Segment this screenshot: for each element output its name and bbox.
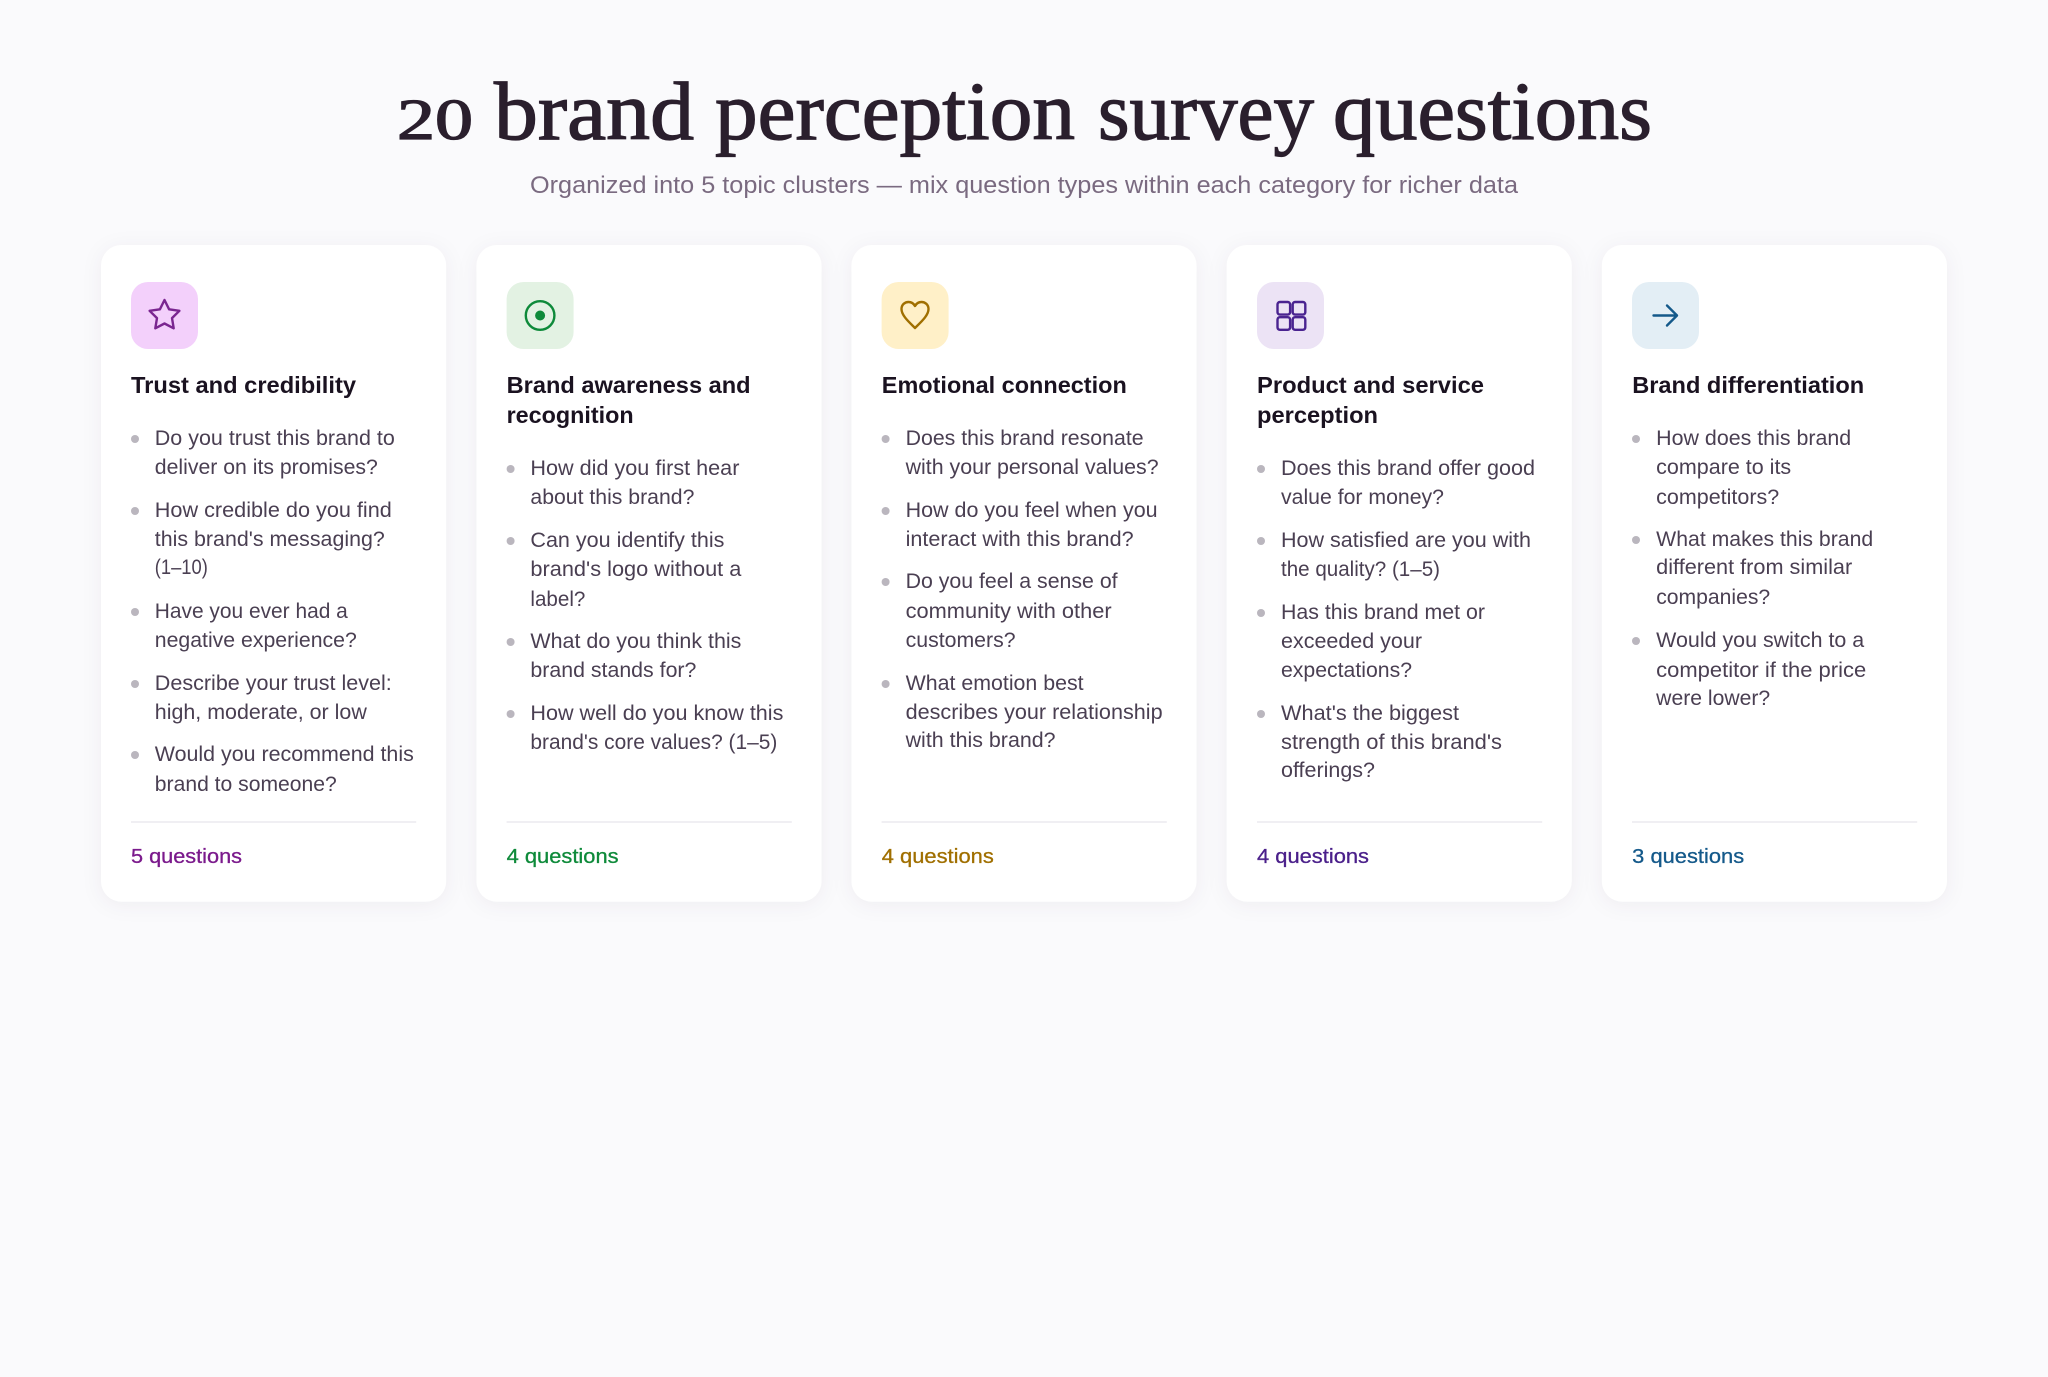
icon: arrow <box>1632 282 1699 349</box>
question 3: brand stands for? <box>530 659 696 682</box>
question 4 <box>507 702 783 754</box>
question 2: brand's logo without a <box>530 558 742 581</box>
panel: brand awareness and recognition <box>476 245 822 902</box>
heading: Emotional connection <box>882 372 1127 398</box>
heading: Brand differentiation <box>1632 372 1864 398</box>
question 3: Do you feel a sense of <box>906 570 1118 593</box>
icon: star <box>131 282 198 349</box>
question 2 <box>882 499 1158 551</box>
question 1: How does this brand <box>1656 427 1851 450</box>
question 4: How well do you know this <box>530 702 783 725</box>
question 4: offerings? <box>1281 759 1375 782</box>
question 1: competitors? <box>1656 486 1779 509</box>
question 4: brand's core values? (1–5) <box>530 731 777 754</box>
question 3: were lower? <box>1655 687 1770 710</box>
question 1: Does this brand offer good <box>1281 457 1535 480</box>
question 3: expectations? <box>1281 659 1412 682</box>
title: questions <box>1333 65 1652 157</box>
heading: recognition <box>507 402 634 428</box>
question 2 <box>1632 528 1873 609</box>
question 2: interact with this brand? <box>906 528 1134 551</box>
heading: Brand awareness and <box>507 372 751 398</box>
question 1 <box>1632 427 1851 509</box>
question 2: companies? <box>1656 586 1770 609</box>
question list <box>1257 457 1535 782</box>
question list <box>1632 427 1873 710</box>
title: perception <box>715 65 1075 157</box>
question 5: Would you recommend this <box>155 743 414 766</box>
subtitle: Organized into 5 topic clusters — mix question types within each category for richer data <box>530 172 1518 199</box>
question 1: with your personal values? <box>905 456 1159 479</box>
card background <box>1227 245 1572 902</box>
icon: heart <box>882 282 949 349</box>
question 1: about this brand? <box>530 486 694 509</box>
question 4 <box>882 672 1163 752</box>
question 1: Do you trust this brand to <box>155 427 395 450</box>
question 3: competitor if the price <box>1656 659 1866 682</box>
question 2 <box>1257 529 1531 581</box>
question 1 <box>131 427 395 479</box>
heading <box>1257 372 1484 428</box>
question 4: describes your relationship <box>906 701 1163 724</box>
question 3: customers? <box>906 629 1016 652</box>
panel: trust and credibility <box>101 245 446 902</box>
question 3: What do you think this <box>530 630 741 653</box>
question 2: Can you identify this <box>530 529 724 552</box>
question 1 <box>1257 457 1535 509</box>
card background <box>476 245 822 902</box>
question 1: deliver on its promises? <box>155 456 378 479</box>
icon: grid <box>1257 282 1324 349</box>
question 3: negative experience? <box>155 629 357 652</box>
title: survey <box>1098 65 1314 157</box>
question count: 4 questions <box>882 845 994 868</box>
title <box>397 65 1652 157</box>
panel: product and service perception <box>1227 245 1572 902</box>
panel: brand differentiation <box>1602 245 1947 902</box>
question 1 <box>507 457 739 509</box>
question 3: exceeded your <box>1281 630 1422 653</box>
question 5 <box>131 743 414 796</box>
heading <box>507 372 751 428</box>
question 2: the quality? (1–5) <box>1281 558 1440 581</box>
question count: 4 questions <box>1257 845 1369 868</box>
heading: perception <box>1257 402 1378 428</box>
question 2: different from similar <box>1656 556 1852 579</box>
question 2: label? <box>530 588 585 611</box>
card background <box>851 245 1197 902</box>
question 3: community with other <box>906 600 1112 623</box>
card background <box>101 245 446 902</box>
question 1: value for money? <box>1281 486 1444 509</box>
question 3: Has this brand met or <box>1281 601 1485 624</box>
heading: Product and service <box>1257 372 1484 398</box>
question 3 <box>882 570 1118 652</box>
title: 20 <box>397 87 473 152</box>
question list <box>882 427 1163 752</box>
question 2: How credible do you find <box>155 499 392 522</box>
question 3 <box>131 600 357 652</box>
question 4: with this brand? <box>905 729 1056 752</box>
question count: 5 questions <box>131 845 242 868</box>
question 3 <box>507 630 741 682</box>
icon: target <box>507 282 574 349</box>
question 1 <box>882 427 1159 479</box>
heading: Trust and credibility <box>131 372 356 398</box>
question 5: brand to someone? <box>155 773 337 796</box>
question 1: How did you first hear <box>530 457 739 480</box>
question 2: How do you feel when you <box>906 499 1158 522</box>
question 4: strength of this brand's <box>1281 731 1502 754</box>
question 4: high, moderate, or low <box>155 701 368 724</box>
panel: emotional connection <box>851 245 1197 902</box>
question list <box>131 427 414 796</box>
card background <box>1602 245 1947 902</box>
question 2 <box>131 499 392 579</box>
question 4: What emotion best <box>906 672 1084 695</box>
question count: 3 questions <box>1632 845 1744 868</box>
question 2: this brand's messaging? <box>155 528 385 551</box>
question list <box>507 457 783 754</box>
question 4 <box>131 672 392 724</box>
question 4: Describe your trust level: <box>155 672 392 695</box>
question 1: Does this brand resonate <box>906 427 1144 450</box>
question 3: Would you switch to a <box>1656 629 1865 652</box>
question 4: What's the biggest <box>1281 702 1459 725</box>
question 3 <box>1257 601 1485 682</box>
question count: 4 questions <box>507 845 619 868</box>
title: brand <box>494 65 694 157</box>
question 2: What makes this brand <box>1656 528 1873 551</box>
question 1: compare to its <box>1656 456 1791 479</box>
question 3: Have you ever had a <box>155 600 348 623</box>
question 2: How satisfied are you with <box>1281 529 1531 552</box>
question 3 <box>1632 629 1866 710</box>
question 4 <box>1257 702 1502 782</box>
question 2 <box>507 529 742 611</box>
question 2: (1–10) <box>155 556 208 579</box>
